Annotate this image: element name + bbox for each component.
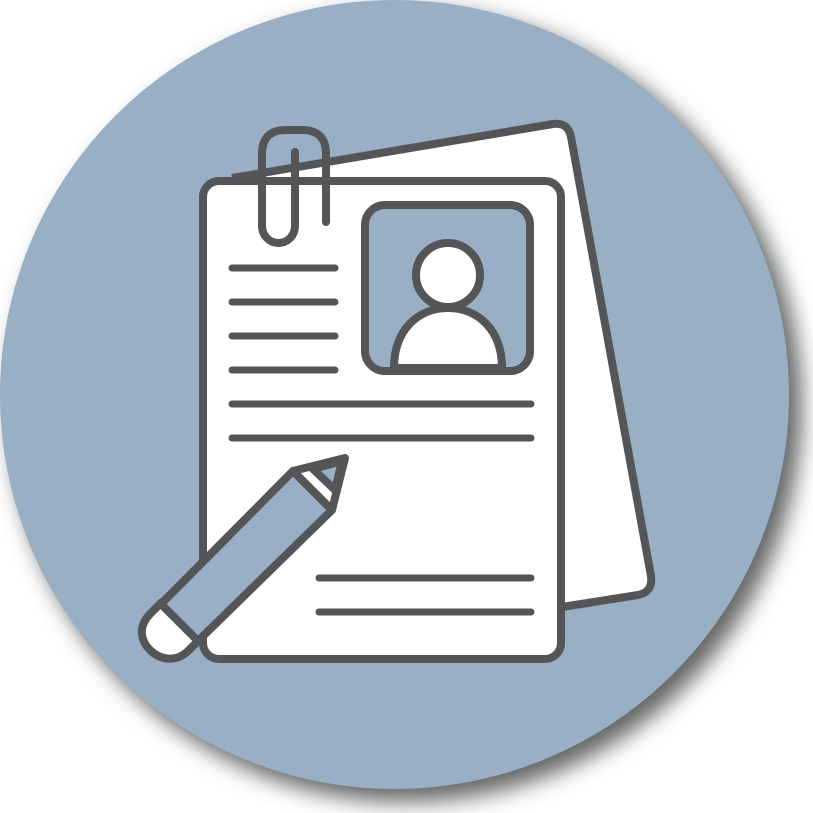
bottom text lines xyxy=(319,578,531,612)
portrait body xyxy=(394,308,502,368)
photo portrait xyxy=(365,205,530,371)
pencil lead xyxy=(313,461,342,490)
paper clip xyxy=(262,130,326,243)
pencil xyxy=(142,458,345,659)
long text lines xyxy=(232,404,531,438)
pencil tip xyxy=(293,458,345,510)
portrait head xyxy=(416,243,480,307)
short text lines beside photo xyxy=(232,268,335,370)
pencil body xyxy=(161,471,332,641)
pencil eraser xyxy=(142,602,198,659)
front sheet of paper xyxy=(203,181,561,659)
back sheet outline xyxy=(232,124,651,607)
back sheet of paper xyxy=(232,124,651,607)
